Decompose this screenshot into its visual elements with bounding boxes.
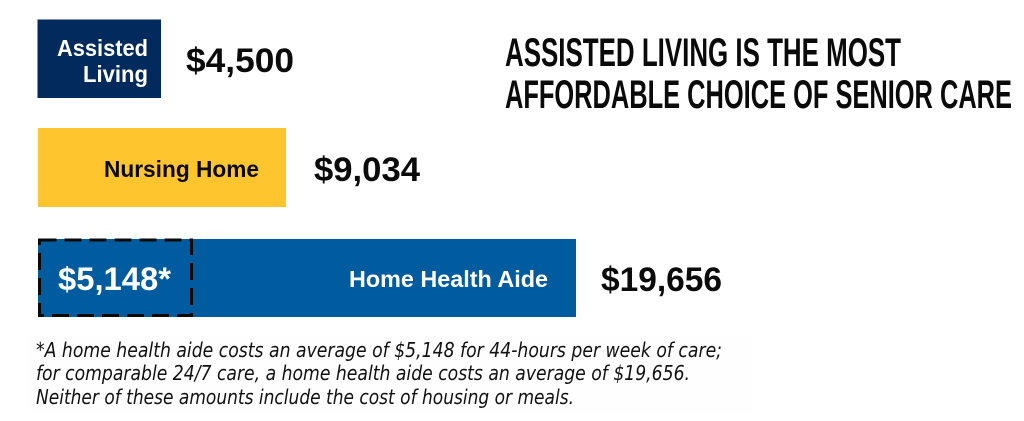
bar: nursing home: [38, 128, 286, 207]
bar: assisted living: Assisted: [57, 35, 148, 61]
value: home health aide cost: $19,656: [601, 261, 722, 299]
bar: home health aide: Home Health Aide: [349, 266, 548, 292]
footnote: for comparable 24/7 care, a home health aide costs an average of $19,656.: [36, 361, 690, 385]
footnote: [36, 338, 722, 409]
footnote: Neither of these amounts include the cost of housing or meals.: [36, 385, 574, 409]
value: nursing home cost: $9,034: [314, 151, 420, 189]
value: assisted living cost: $4,500: [186, 42, 294, 80]
footnote: *A home health aide costs an average of $5,148 for 44-hours per week of care;: [36, 338, 722, 362]
bar: assisted living: Living: [83, 61, 148, 87]
footnote background: [28, 335, 751, 413]
bar: nursing home: Nursing Home: [104, 156, 259, 182]
dashed box: 44-hour cost: $5,148*: [58, 261, 172, 297]
bar: assisted living: [38, 20, 161, 98]
dashed box: 44-hour cost: [40, 240, 192, 316]
title: [505, 31, 1012, 117]
bar: home health aide: [38, 239, 576, 317]
